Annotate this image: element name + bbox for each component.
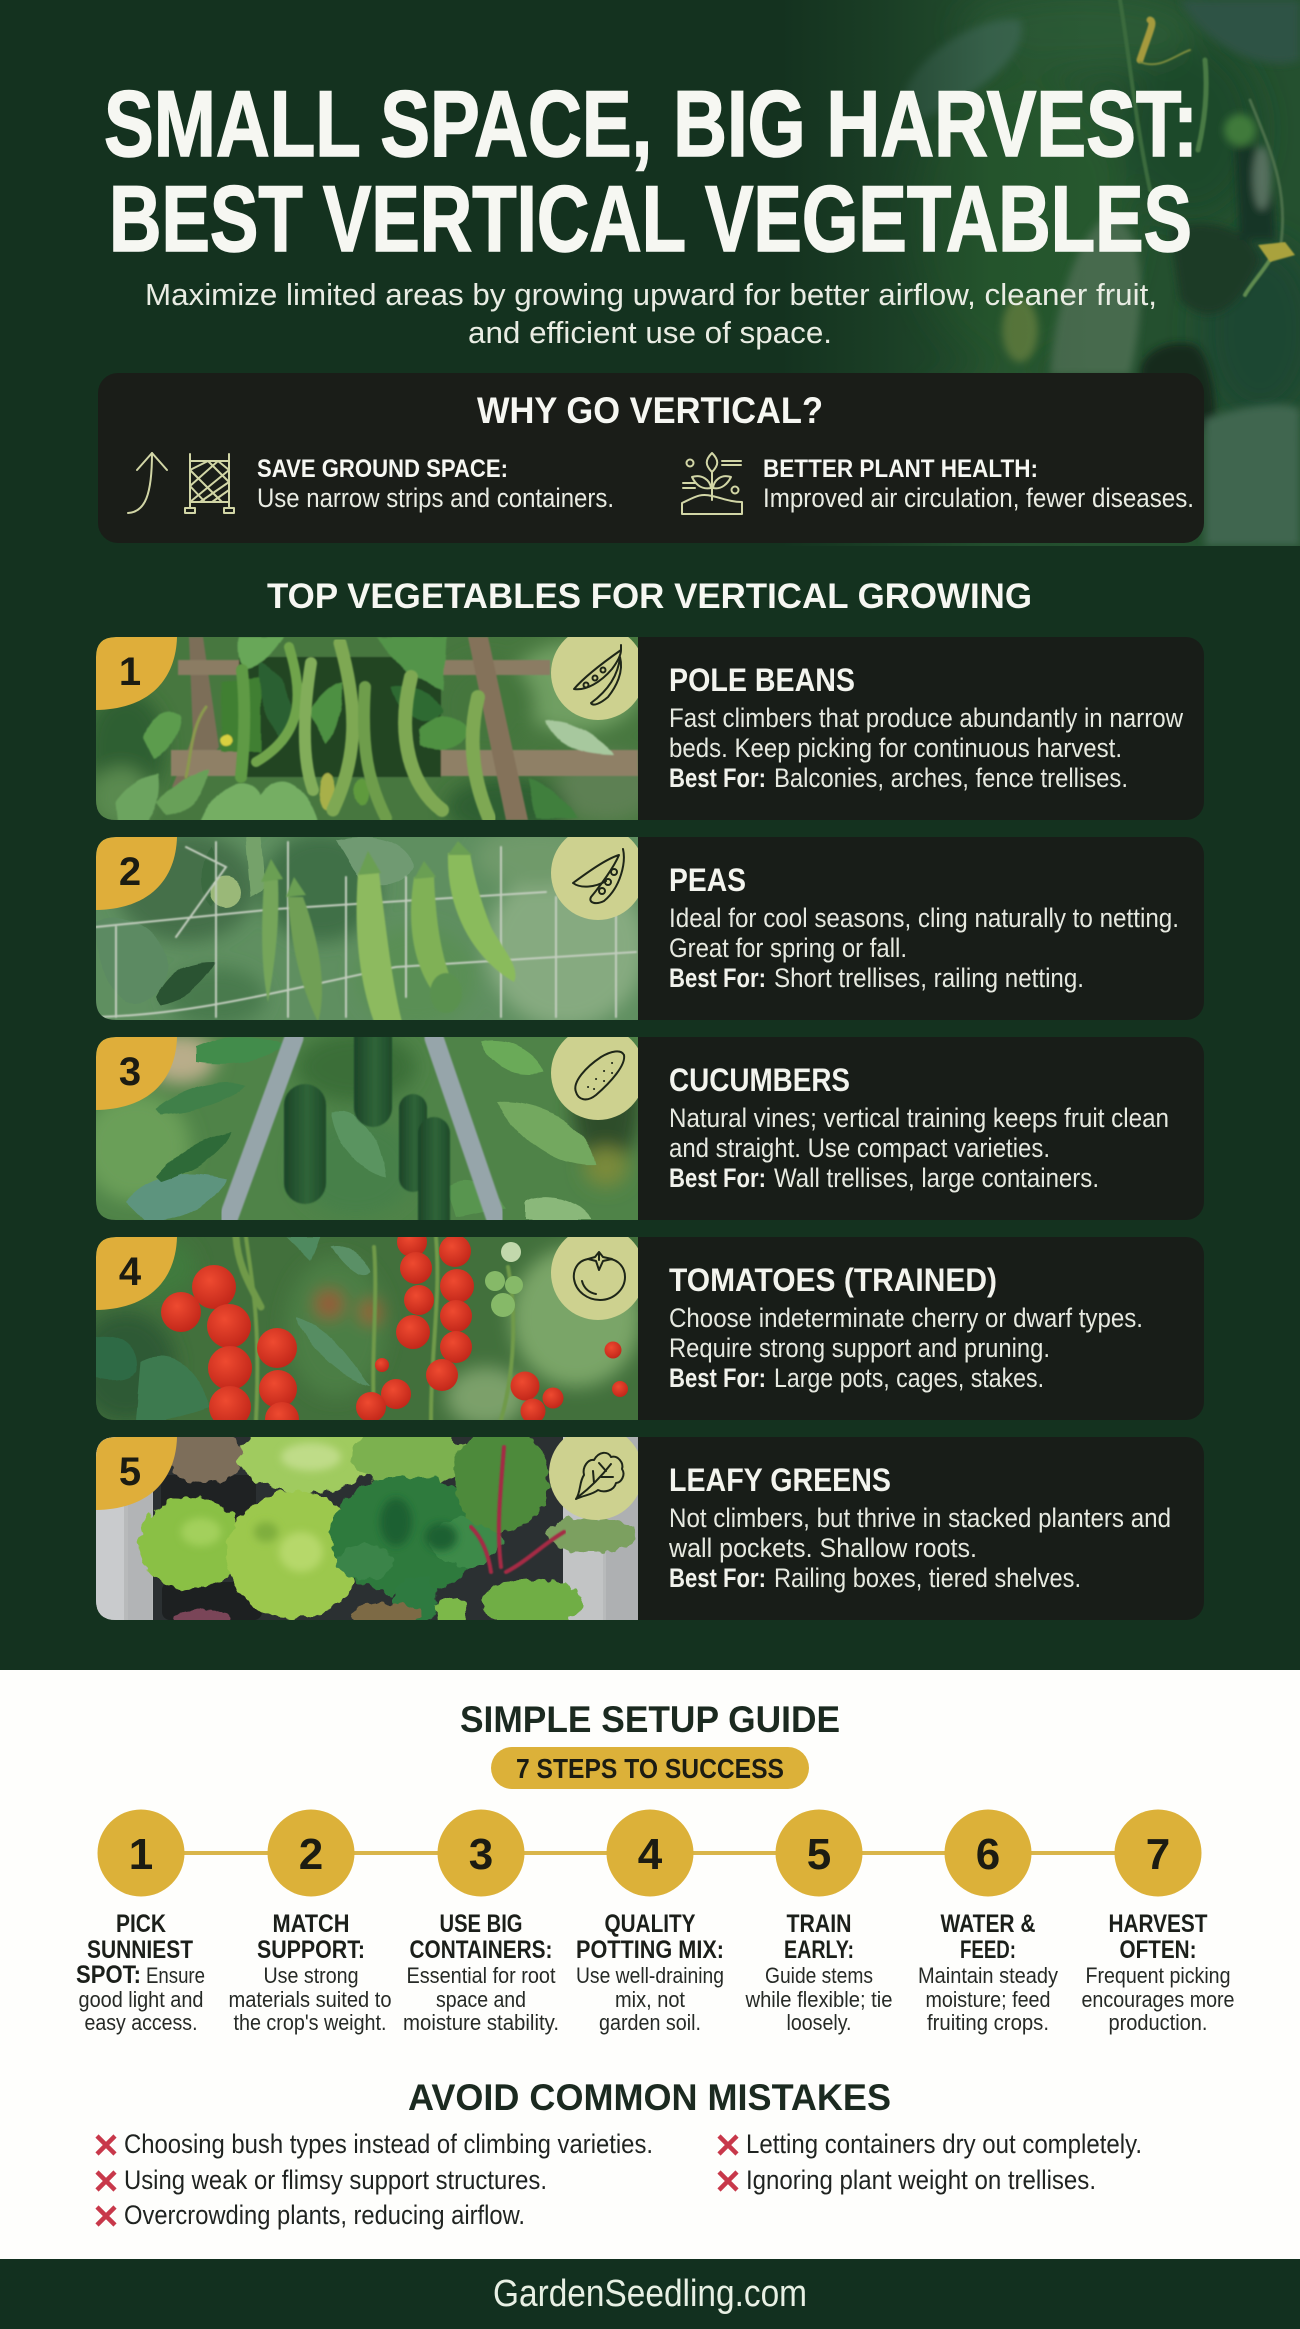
step connector line bbox=[141, 1851, 1158, 1855]
card text: tomatoes: Choose indeterminate cherry or dwarf types. bbox=[669, 1303, 1143, 1333]
step 7 bbox=[1082, 1810, 1234, 2035]
step 7: 7 bbox=[1146, 1830, 1170, 1879]
step 3: Essential for root bbox=[406, 1963, 556, 1988]
step 5: loosely. bbox=[786, 2010, 852, 2035]
header photo background: cucumber vines bbox=[850, 0, 1300, 546]
card text: leafy greens: LEAFY GREENS bbox=[669, 1462, 891, 1498]
card text: cucumbers bbox=[669, 1062, 1169, 1193]
heading: avoid common mistakes: AVOID COMMON MISTAKES bbox=[408, 2077, 891, 2118]
card text: leafy greens bbox=[668, 1462, 1171, 1593]
step 4: POTTING MIX: bbox=[576, 1936, 724, 1964]
white lower section bbox=[0, 1670, 1300, 2259]
card text: pole beans: Best For: bbox=[669, 763, 766, 793]
step 7: OFTEN: bbox=[1120, 1936, 1196, 1964]
card text: cucumbers: Natural vines; vertical training keeps fruit clean bbox=[669, 1103, 1169, 1133]
step 5 bbox=[745, 1810, 892, 2035]
step 2: the crop's weight. bbox=[234, 2010, 386, 2035]
card 5: leafy greens bbox=[96, 1437, 1204, 1620]
badge number 1: 1 bbox=[119, 650, 141, 694]
step 3: moisture stability. bbox=[403, 2010, 559, 2035]
card text: cucumbers: Best For: bbox=[669, 1163, 766, 1193]
title bbox=[104, 71, 1198, 271]
icon: pea pod bbox=[551, 837, 638, 920]
step 7: Frequent picking bbox=[1086, 1963, 1230, 1988]
step 4: QUALITY bbox=[604, 1910, 696, 1938]
icon: upward arrow bbox=[128, 453, 167, 513]
card text: cucumbers: Wall trellises, large containers. bbox=[774, 1163, 1099, 1193]
card text: pole beans: beds. Keep picking for continuous harvest. bbox=[669, 733, 1122, 763]
badge number 2 bbox=[96, 837, 177, 910]
card text: leafy greens: Railing boxes, tiered shelves. bbox=[774, 1563, 1081, 1593]
card text: tomatoes bbox=[669, 1262, 1143, 1393]
heading: simple setup guide: SIMPLE SETUP GUIDE bbox=[460, 1699, 840, 1740]
mistake 2: Using weak or flimsy support structures. bbox=[124, 2165, 547, 2195]
card text: peas: Short trellises, railing netting. bbox=[774, 963, 1084, 993]
card text: peas: Ideal for cool seasons, cling naturally to netting. bbox=[669, 903, 1179, 933]
card 3: cucumbers bbox=[96, 1037, 1204, 1220]
step 3: 3 bbox=[469, 1830, 493, 1879]
photo: tomatoes bbox=[96, 1237, 638, 1420]
card text: tomatoes: Large pots, cages, stakes. bbox=[774, 1363, 1044, 1393]
photo: leafy greens bbox=[96, 1437, 638, 1620]
step 3: CONTAINERS: bbox=[410, 1936, 552, 1964]
mistake 3: Overcrowding plants, reducing airflow. bbox=[124, 2200, 525, 2230]
text: better plant health: BETTER PLANT HEALTH: bbox=[763, 455, 1038, 483]
step 7: production. bbox=[1108, 2010, 1208, 2035]
card 4: tomatoes bbox=[96, 1237, 1204, 1420]
page background bbox=[0, 0, 1300, 1670]
card 1: pole beans bbox=[96, 637, 1204, 820]
card text: peas: Great for spring or fall. bbox=[669, 933, 907, 963]
panel: why go vertical bbox=[98, 373, 1204, 543]
heading: top vegetables: TOP VEGETABLES FOR VERTICAL GROWING bbox=[267, 577, 1032, 616]
step 4: 4 bbox=[638, 1830, 663, 1879]
step 1: 1 bbox=[129, 1830, 153, 1879]
step 6: WATER & bbox=[940, 1910, 1036, 1938]
subtitle bbox=[145, 277, 1157, 350]
card text: peas: Best For: bbox=[669, 963, 766, 993]
badge number 3 bbox=[96, 1037, 177, 1110]
mistake 5: Ignoring plant weight on trellises. bbox=[746, 2165, 1096, 2195]
trellis posts and bars bbox=[172, 637, 219, 787]
step 3: USE BIG bbox=[440, 1910, 522, 1938]
card text: pole beans: Balconies, arches, fence trellises. bbox=[774, 763, 1128, 793]
step 6: FEED: bbox=[960, 1936, 1016, 1964]
step 5: EARLY: bbox=[784, 1936, 854, 1964]
card text: pole beans bbox=[669, 662, 1183, 793]
step 6 bbox=[918, 1810, 1058, 2035]
step 1: PICK bbox=[116, 1910, 166, 1938]
step 6: 6 bbox=[976, 1830, 1000, 1879]
step 4 bbox=[576, 1810, 724, 2035]
card text: pole beans: Fast climbers that produce abundantly in narrow bbox=[669, 703, 1183, 733]
step 6: Maintain steady bbox=[918, 1963, 1058, 1988]
text: better plant health: Improved air circulation, fewer diseases. bbox=[763, 483, 1194, 513]
icon: cucumber bbox=[551, 1037, 638, 1120]
step 1: good light and bbox=[78, 1987, 204, 2012]
icon: tomato bbox=[551, 1237, 638, 1320]
pill: 7 steps to success bbox=[491, 1747, 809, 1789]
card text: peas: PEAS bbox=[669, 862, 746, 898]
step 3 bbox=[403, 1810, 559, 2035]
step 2: Use strong bbox=[264, 1963, 358, 1988]
card text: tomatoes: TOMATOES (TRAINED) bbox=[669, 1262, 997, 1298]
footer bbox=[0, 2259, 1300, 2329]
step 1 bbox=[76, 1810, 205, 2035]
step 2: 2 bbox=[299, 1830, 323, 1879]
badge number 3: 3 bbox=[119, 1050, 141, 1094]
icon: bean pods bbox=[551, 637, 638, 720]
step 5: TRAIN bbox=[786, 1910, 852, 1938]
step 1: SUNNIEST bbox=[87, 1936, 193, 1964]
step 6: fruiting crops. bbox=[927, 2010, 1049, 2035]
card text: tomatoes: Require strong support and pruning. bbox=[669, 1333, 1050, 1363]
badge number 5 bbox=[96, 1437, 177, 1510]
badge number 5: 5 bbox=[119, 1450, 141, 1494]
step 5: Guide stems bbox=[765, 1963, 873, 1988]
mistake 4: Letting containers dry out completely. bbox=[746, 2129, 1142, 2159]
card text: leafy greens: Not climbers, but thrive in stacked planters and bbox=[669, 1503, 1171, 1533]
step 2 bbox=[228, 1810, 392, 2035]
step 2: materials suited to bbox=[228, 1987, 392, 2012]
step 3: space and bbox=[436, 1987, 526, 2012]
subtitle: Maximize limited areas by growing upward for better airflow, cleaner fruit, bbox=[145, 277, 1157, 312]
heading: why go vertical: WHY GO VERTICAL? bbox=[477, 390, 823, 431]
text: save ground space: Use narrow strips and containers. bbox=[257, 483, 614, 513]
card text: leafy greens: wall pockets. Shallow roots. bbox=[668, 1533, 977, 1563]
step 1: easy access. bbox=[84, 2010, 198, 2035]
step 7: encourages more bbox=[1082, 1987, 1234, 2012]
icon: trellis bbox=[185, 454, 234, 513]
photo: cucumbers bbox=[96, 1037, 638, 1220]
badge number 1 bbox=[96, 637, 177, 710]
photo: pole beans bbox=[96, 637, 638, 820]
mistake 1: Choosing bush types instead of climbing varieties. bbox=[124, 2129, 653, 2159]
step 5: 5 bbox=[807, 1830, 831, 1879]
card text: cucumbers: CUCUMBERS bbox=[669, 1062, 850, 1098]
step 7: HARVEST bbox=[1108, 1910, 1208, 1938]
badge number 4: 4 bbox=[119, 1250, 142, 1294]
footer: GardenSeedling.com bbox=[493, 2273, 807, 2315]
step 1: SPOT: bbox=[76, 1961, 141, 1989]
text: save ground space: SAVE GROUND SPACE: bbox=[257, 455, 508, 483]
badge number 4 bbox=[96, 1237, 177, 1310]
card text: cucumbers: and straight. Use compact varieties. bbox=[669, 1133, 1050, 1163]
card 2: peas bbox=[95, 826, 1204, 1027]
icon: leafy green bbox=[549, 1437, 638, 1520]
step 2: MATCH bbox=[272, 1910, 350, 1938]
photo: peas bbox=[96, 837, 638, 1020]
text: save ground space bbox=[257, 455, 614, 513]
icon: healthy plant bbox=[682, 453, 742, 514]
step 1: Ensure bbox=[146, 1963, 205, 1988]
card text: peas bbox=[669, 862, 1179, 993]
step 4: garden soil. bbox=[599, 2010, 701, 2035]
card text: tomatoes: Best For: bbox=[669, 1363, 766, 1393]
step 2: SUPPORT: bbox=[257, 1936, 365, 1964]
badge number 2: 2 bbox=[119, 850, 141, 894]
text: better plant health bbox=[763, 455, 1194, 513]
step 4: mix, not bbox=[615, 1987, 685, 2012]
step 5: while flexible; tie bbox=[745, 1987, 892, 2012]
step 4: Use well-draining bbox=[576, 1963, 724, 1988]
pill: 7 steps to success: 7 STEPS TO SUCCESS bbox=[516, 1753, 784, 1784]
card text: pole beans: POLE BEANS bbox=[669, 662, 855, 698]
card text: leafy greens: Best For: bbox=[669, 1563, 766, 1593]
mistakes list bbox=[97, 2129, 1142, 2230]
subtitle: and efficient use of space. bbox=[468, 315, 832, 350]
step 6: moisture; feed bbox=[926, 1987, 1050, 2012]
